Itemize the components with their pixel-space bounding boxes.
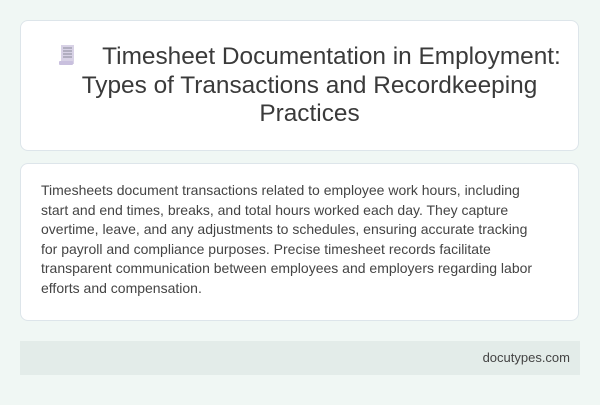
footer text: source: docutypes.com [483, 350, 570, 365]
footer bar [20, 341, 580, 375]
text block: description: start and end times, breaks, and total hours worked each day. They capture [41, 202, 508, 218]
panel: title card [20, 20, 579, 151]
text block: description: efforts and compensation. [41, 280, 202, 296]
title: Timesheet Documentation in Employment: Types of Transactions and Recordkeeping Practices [82, 43, 561, 127]
panel: description card [20, 163, 579, 321]
text block: description: Timesheets document transactions related to employee work hours, including [41, 182, 520, 198]
text block: description [41, 182, 532, 296]
text block: description: transparent communication between employees and employers regarding labor [41, 260, 532, 276]
icon: receipt [59, 45, 74, 65]
text block: description: for payroll and compliance purposes. Precise timesheet records facilitate [41, 241, 491, 257]
text block: description: overtime, leave, and any adjustments to schedules, ensuring accurate tracking [41, 221, 527, 237]
